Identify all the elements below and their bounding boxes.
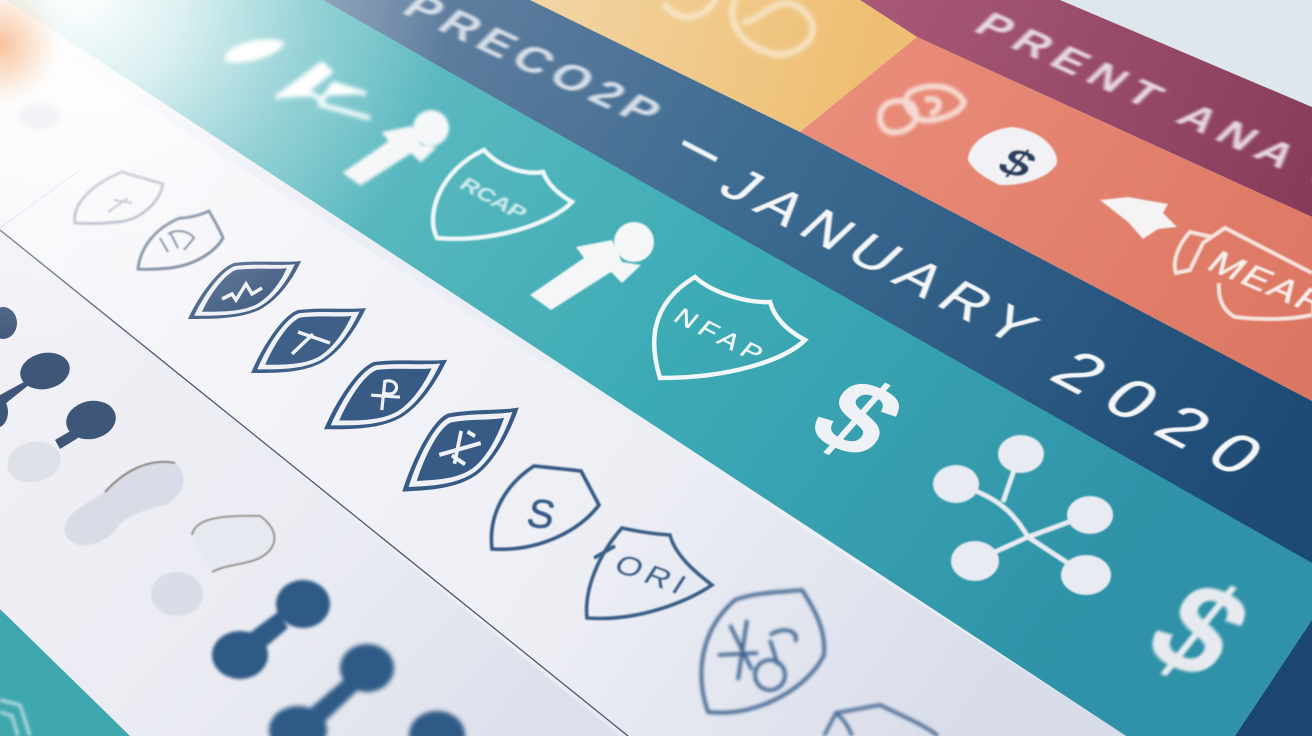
icon: shield ORI — [587, 528, 712, 618]
icon: outlined cut-out — [192, 516, 274, 572]
icon: blurred dumbbell 2 — [212, 580, 330, 679]
icon: network nodes — [933, 435, 1113, 595]
panel: coral band — [800, 37, 1312, 401]
icon: person small — [342, 110, 449, 186]
icon: dollar sign: $ — [786, 356, 929, 480]
icon: blurred house — [824, 705, 938, 736]
icon: dollar badge — [968, 127, 1057, 187]
icon: outline shield 1 — [75, 172, 163, 224]
heading: year 2020: 2020 — [1037, 340, 1278, 487]
icon: peanut cut-out — [64, 462, 184, 545]
sun glare — [0, 0, 520, 420]
letter S: S — [523, 491, 559, 538]
icon: navy dumbbell 1 — [0, 348, 73, 428]
icon: shield S — [491, 466, 599, 549]
icon: leaf badge 3 — [188, 261, 301, 319]
panel: lower teal corner — [0, 609, 130, 736]
icon: navy and pale dumbbell — [3, 396, 119, 487]
icon: faint top-left dot — [20, 103, 60, 129]
icon: outline shield 2 — [138, 211, 223, 269]
icon: blurred scribble — [665, 0, 813, 55]
icon: partial navy node — [0, 307, 17, 339]
icon: blurred dollar sign: $ — [1119, 554, 1279, 706]
panel: lower white strip — [0, 230, 628, 736]
label: RCAP: RCAP — [455, 173, 532, 224]
icon: blurred symbol shield — [701, 590, 824, 713]
peach light leak — [0, 0, 70, 110]
dollar sign: $ — [988, 140, 1046, 187]
icon: arrow — [1100, 197, 1177, 239]
icon: person large — [530, 222, 654, 310]
icon: circle cut-out — [151, 572, 203, 616]
icon: blurred oval — [225, 39, 285, 63]
panel: yellow band — [530, 0, 917, 132]
icon: leaf badge T — [251, 308, 366, 373]
panel: pale sky corner — [1060, 0, 1312, 107]
faint corner icon — [0, 700, 30, 736]
faint left panel edge — [0, 170, 80, 228]
icon: NFAP shield — [654, 277, 805, 378]
icon: leaf badge dollar — [398, 407, 523, 492]
divider line — [0, 230, 628, 736]
icon: leaf badge P — [324, 360, 447, 429]
label: ORI: ORI — [609, 548, 692, 600]
icon: blurred dumbbell 3 — [269, 644, 465, 736]
lower corner of navy — [1235, 620, 1312, 736]
icon: linked loops — [880, 86, 964, 132]
panel: navy title band — [323, 0, 1312, 736]
label: NFAP: NFAP — [668, 303, 769, 367]
title dash — [682, 140, 718, 162]
icon: badge with MEAR — [1175, 228, 1312, 321]
panel: crimson band — [860, 0, 1312, 217]
icon: RCAP shield — [433, 150, 572, 239]
icon: blurred figure — [276, 64, 370, 118]
heading: January: JANUARY — [708, 159, 1050, 353]
